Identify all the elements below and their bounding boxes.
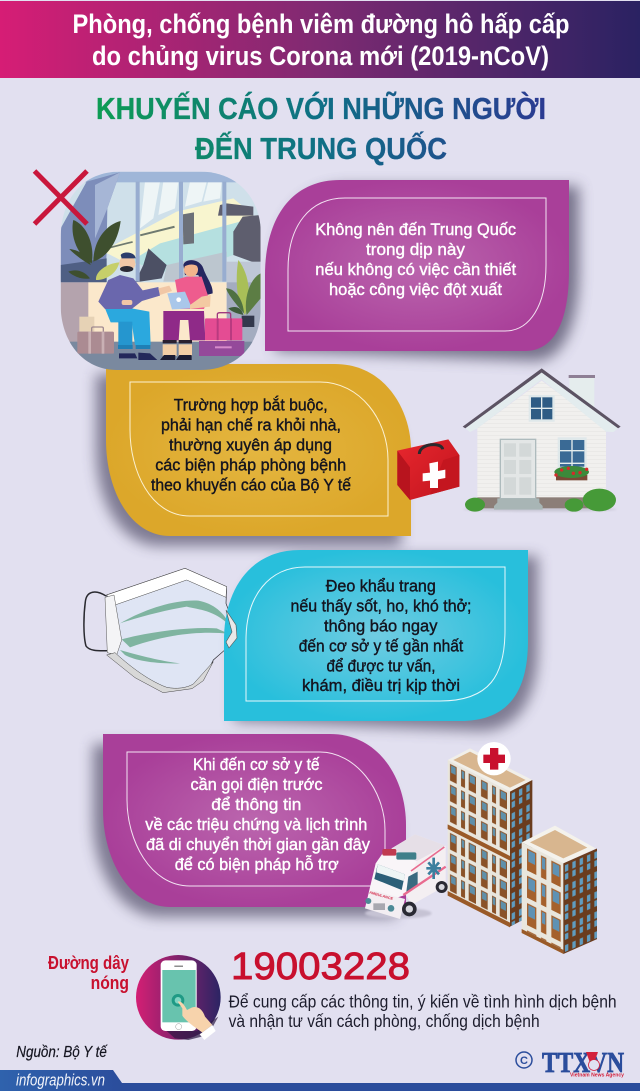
panel text: hoặc công việc đột xuất bbox=[329, 280, 502, 299]
plane bbox=[103, 198, 261, 282]
mask side strap bbox=[226, 610, 237, 648]
panel text bbox=[290, 577, 472, 695]
illustration: house bbox=[397, 368, 621, 512]
plant right bbox=[226, 260, 261, 327]
logo: TTXVN: Vietnam News Agency bbox=[570, 1072, 624, 1078]
panel text: đến cơ sở y tế gần nhất bbox=[299, 637, 463, 656]
ambulance bbox=[365, 834, 448, 919]
hotline label: nóng bbox=[91, 973, 129, 993]
panel text: về các triệu chứng và lịch trình bbox=[145, 815, 367, 834]
hotline description bbox=[229, 992, 617, 1031]
panel: limit going outside bbox=[96, 364, 411, 546]
tall building bbox=[448, 748, 532, 927]
source: Nguồn: Bộ Y tế bbox=[16, 1044, 108, 1061]
icon: phone in hand bbox=[136, 955, 221, 1040]
header banner bbox=[0, 1, 640, 78]
plant left bbox=[68, 220, 121, 280]
icon: first aid kit bbox=[397, 439, 459, 500]
panel text: để được tư vấn, bbox=[326, 657, 436, 676]
panel text bbox=[315, 220, 517, 299]
panel text: Không nên đến Trung Quốc bbox=[315, 220, 517, 239]
panel: call ahead bbox=[93, 734, 406, 917]
panel text: để có biện pháp hỗ trợ bbox=[175, 855, 339, 874]
door bbox=[500, 439, 536, 499]
panel text: phải hạn chế ra khỏi nhà, bbox=[161, 416, 341, 435]
banner title: do chủng virus Corona mới (2019-nCoV) bbox=[92, 41, 549, 71]
banner title: Phòng, chống bệnh viêm đường hô hấp cấp bbox=[72, 9, 570, 39]
panel text: Trường hợp bắt buộc, bbox=[174, 396, 328, 415]
panel text: Đeo khẩu trang bbox=[326, 577, 436, 596]
ambulance: AMBULANCE bbox=[369, 890, 394, 901]
illustration: travellers at airport bbox=[61, 172, 261, 372]
hotline number: 19003228 bbox=[231, 946, 410, 988]
panel: do not travel to China bbox=[265, 180, 579, 361]
footer bar bbox=[0, 1070, 640, 1091]
banner title bbox=[72, 9, 570, 71]
illustration: surgical mask bbox=[84, 568, 235, 693]
panel text: cần gọi điện trước bbox=[190, 775, 323, 794]
panel text: các biện pháp phòng bệnh bbox=[155, 456, 346, 475]
woman bbox=[160, 260, 213, 360]
hotline label bbox=[48, 953, 129, 993]
hotline description: và nhận tư vấn cách phòng, chống dịch bệnh bbox=[229, 1011, 540, 1031]
panel text: trong dịp này bbox=[366, 240, 465, 259]
panel text: khám, điều trị kịp thời bbox=[302, 676, 460, 695]
footer site name: infographics.vn bbox=[16, 1070, 105, 1090]
panel text: theo khuyến cáo của Bộ Y tế bbox=[151, 476, 351, 495]
panel text: thường xuyên áp dụng bbox=[169, 436, 332, 455]
wall and floor bbox=[61, 282, 89, 362]
icon: hospital cross bbox=[477, 742, 511, 775]
main heading: KHUYẾN CÁO VỚI NHỮNG NGƯỜI bbox=[96, 90, 546, 126]
panel text: thông báo ngay bbox=[324, 617, 438, 636]
main heading: ĐẾN TRUNG QUỐC bbox=[195, 130, 447, 166]
luggage bbox=[77, 313, 244, 356]
panel: wear a mask bbox=[224, 550, 538, 731]
panel text: Khi đến cơ sở y tế bbox=[193, 755, 320, 774]
logo: TTXVN bbox=[516, 1047, 624, 1079]
panel text: để thông tin bbox=[211, 795, 301, 814]
hotline label: Đường dây bbox=[48, 953, 129, 973]
main heading bbox=[96, 90, 546, 166]
man bbox=[98, 253, 172, 360]
panel text bbox=[151, 396, 351, 495]
small building bbox=[522, 826, 597, 954]
illustration: hospital buildings and ambulance bbox=[365, 742, 597, 954]
panel text: đã di chuyển thời gian gần đây bbox=[146, 835, 370, 854]
icon: red cross mark bbox=[34, 171, 87, 224]
logo: TTXVN: C bbox=[520, 1055, 528, 1067]
panel text: nếu không có việc cần thiết bbox=[315, 260, 516, 279]
panel text: nếu thấy sốt, ho, khó thở; bbox=[290, 597, 472, 616]
panel text bbox=[145, 755, 370, 874]
